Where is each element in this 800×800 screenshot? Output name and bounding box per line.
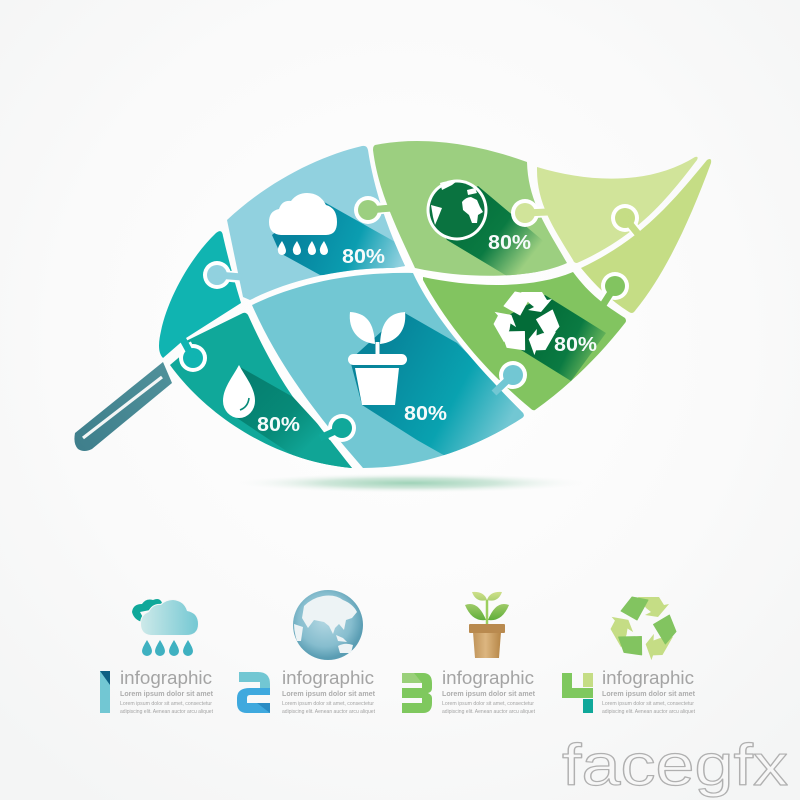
legend text 2: Lorem ipsum dolor sit amet [282, 689, 375, 698]
puzzle knob: pale into green [511, 199, 548, 227]
legend text 4 [602, 668, 696, 715]
ground shadow under leaf [235, 473, 585, 493]
piece: teal upper-left [159, 231, 241, 358]
icon: water drop [223, 365, 255, 418]
icon: legend cloud [132, 599, 198, 656]
puzzle knob: green into blue [354, 196, 392, 224]
percent labels: 80% [404, 403, 447, 425]
percent labels: 80% [554, 334, 597, 356]
piece: pale green tip [537, 157, 698, 263]
percent labels: 80% [488, 232, 531, 254]
piece: green earth [373, 141, 567, 285]
legend text 1: infographic [120, 668, 212, 688]
percent labels: 80% [257, 414, 300, 436]
legend text 1: Lorem ipsum dolor sit amet [120, 689, 213, 698]
number 2 [237, 672, 270, 713]
legend text 2: infographic [282, 668, 374, 688]
piece: blue pot [252, 273, 540, 470]
icon: legend globe [293, 590, 363, 660]
legend text 4: Lorem ipsum dolor sit amet, consectetur [602, 701, 694, 707]
puzzle knob: blue into teal [203, 261, 242, 289]
icon: plant pot [348, 312, 407, 405]
piece: teal lower-left [170, 313, 360, 470]
leaf puzzle [159, 141, 711, 470]
icon: rain cloud [269, 193, 337, 255]
legend text 3: adipiscing elit. Aenean auctor arcu aliquet [442, 709, 536, 715]
puzzle knob: green into lime [601, 272, 629, 308]
legend text 3: Lorem ipsum dolor sit amet [442, 689, 535, 698]
piece: green recycle [423, 272, 626, 410]
legend text 2: adipiscing elit. Aenean auctor arcu aliquet [282, 709, 376, 715]
icon: legend plant pot [465, 592, 509, 658]
puzzle knob: teal into lower teal [179, 336, 207, 372]
piece: lime edge [581, 159, 711, 313]
leaf stem [74, 362, 172, 451]
icon: earth globe [426, 180, 488, 240]
legend text 4: adipiscing elit. Aenean auctor arcu aliquet [602, 709, 696, 715]
number 3 [402, 673, 432, 713]
legend text 1: adipiscing elit. Aenean auctor arcu aliquet [120, 709, 214, 715]
watermark: facegfx [562, 733, 788, 798]
puzzle knob: lime into pale [611, 204, 643, 240]
icon: legend recycle [606, 597, 681, 664]
legend text 2 [282, 668, 376, 715]
number 1 [100, 671, 110, 713]
legend text 1 [120, 668, 214, 715]
infographic canvas [74, 141, 788, 798]
legend text 3 [442, 668, 536, 715]
legend text 4: Lorem ipsum dolor sit amet [602, 689, 695, 698]
legend text 4: infographic [602, 668, 694, 688]
legend text 2: Lorem ipsum dolor sit amet, consectetur [282, 701, 374, 707]
icon: recycle [489, 292, 564, 359]
legend text 3: Lorem ipsum dolor sit amet, consectetur [442, 701, 534, 707]
puzzle knob: lower teal into blue [320, 414, 356, 442]
legend text 1: Lorem ipsum dolor sit amet, consectetur [120, 701, 212, 707]
puzzle knob: blue into green [494, 361, 527, 393]
legend text 3: infographic [442, 668, 534, 688]
piece: light blue rain [227, 146, 420, 300]
number 4 [562, 673, 593, 713]
percent labels: 80% [342, 246, 385, 268]
percent labels [257, 232, 597, 436]
